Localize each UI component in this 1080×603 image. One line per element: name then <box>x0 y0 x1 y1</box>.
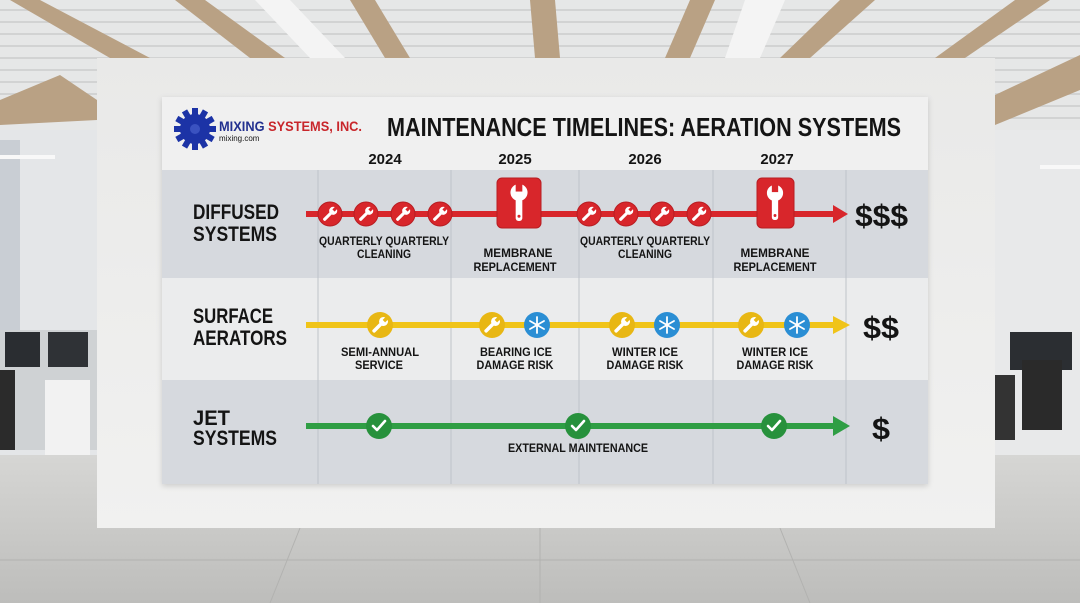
row 2: surface aerators timeline: DAMAGE RISK <box>736 358 814 372</box>
year headers: 2025 <box>498 151 532 168</box>
row 2: surface aerators timeline: SEMI-ANNUAL <box>341 345 419 359</box>
company name: MIXING SYSTEMS, INC. <box>219 118 362 134</box>
year headers: 2027 <box>760 151 794 168</box>
row 2: surface aerators timeline: WINTER ICE <box>612 345 678 359</box>
wall panel <box>97 58 995 528</box>
row 2: surface aerators timeline: BEARING ICE <box>480 345 552 359</box>
row 1: diffused systems timeline: QUARTERLY QUARTERLY <box>319 234 449 248</box>
row 1: diffused systems timeline: REPLACEMENT <box>474 260 557 274</box>
cost: $$$: $$$ <box>855 198 908 233</box>
row 2: surface aerators timeline: WINTER ICE <box>742 345 808 359</box>
year headers: 2024 <box>368 151 402 168</box>
title: MAINTENANCE TIMELINES: AERATION SYSTEMS <box>387 112 901 142</box>
icon: gear <box>174 108 216 150</box>
row 2: surface aerators timeline: DAMAGE RISK <box>606 358 684 372</box>
row 3: jet systems timeline <box>306 411 890 455</box>
logo <box>174 108 362 150</box>
year headers <box>368 151 794 168</box>
row 1: diffused systems timeline: MEMBRANE <box>484 246 552 260</box>
row 1: diffused systems timeline: QUARTERLY QUARTERLY <box>580 234 710 248</box>
row labels: SYSTEMS <box>193 427 277 450</box>
row 2: surface aerators timeline <box>306 310 899 372</box>
row 1: diffused systems timeline <box>306 178 908 274</box>
row labels: SYSTEMS <box>193 223 277 246</box>
row 1: diffused systems timeline: REPLACEMENT <box>734 260 817 274</box>
cost: $: $ <box>872 411 890 446</box>
row 1: diffused systems timeline: CLEANING <box>357 247 411 261</box>
logo: mixing.com <box>219 134 260 143</box>
row 3: jet systems timeline: EXTERNAL MAINTENANCE <box>508 441 648 455</box>
cost: $$: $$ <box>863 310 899 345</box>
infographic board <box>162 97 928 484</box>
row labels: SURFACE <box>193 305 273 328</box>
row 2: surface aerators timeline: SERVICE <box>355 358 403 372</box>
row labels: JET <box>193 407 230 430</box>
row labels <box>193 201 287 450</box>
row 1: diffused systems timeline: CLEANING <box>618 247 672 261</box>
year headers: 2026 <box>628 151 662 168</box>
row labels: AERATORS <box>193 327 287 350</box>
row 1: diffused systems timeline: MEMBRANE <box>740 246 810 260</box>
row labels: DIFFUSED <box>193 201 279 224</box>
row 2: surface aerators timeline: DAMAGE RISK <box>476 358 554 372</box>
